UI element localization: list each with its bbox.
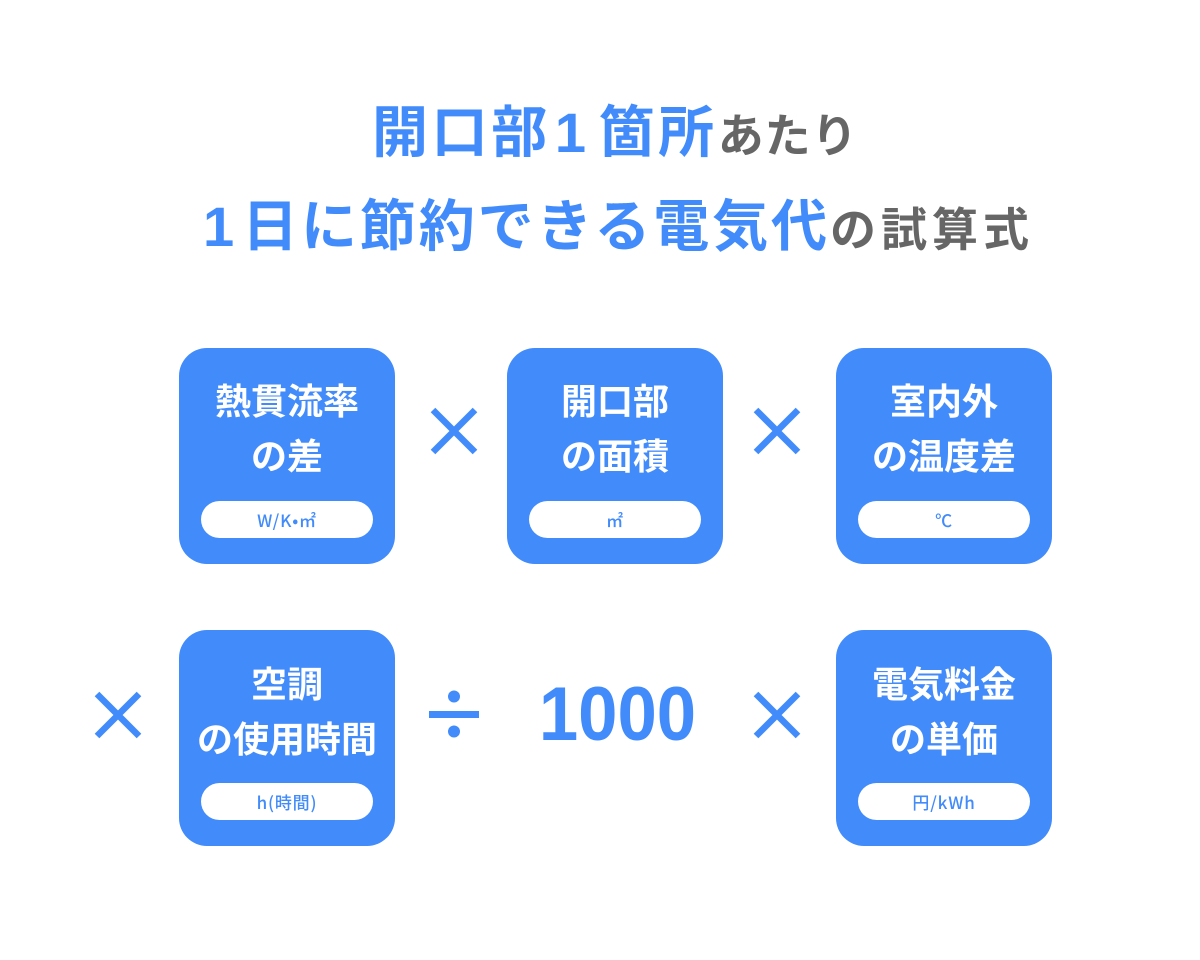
unit: ℃: ℃ <box>935 507 953 532</box>
label: 室内外: 室内外 <box>890 381 998 422</box>
panel: 開口部の面積 <box>507 348 723 564</box>
operator: multiply 1 <box>430 408 478 454</box>
label: 電気料金: 電気料金 <box>872 664 1016 705</box>
panel: 熱貫流率の差 <box>179 348 395 564</box>
label: の面積: の面積 <box>561 436 669 477</box>
label: の使用時間: の使用時間 <box>197 719 377 760</box>
operator: multiply 3 <box>94 692 142 738</box>
unit: 円/kWh <box>858 783 1030 820</box>
panel: 電気料金の単価 <box>836 630 1052 846</box>
title line 2: 1日に節約できる電気代の試算式 <box>203 195 1034 258</box>
panel: 空調の使用時間 <box>179 630 395 846</box>
label: 空調: 空調 <box>251 664 323 705</box>
title <box>203 101 1034 258</box>
label: 開口部: 開口部 <box>561 381 669 422</box>
unit: W/K・㎡ <box>201 501 373 538</box>
operator: multiply 2 <box>754 408 800 454</box>
label: の差: の差 <box>251 436 323 477</box>
unit: W/K・㎡: W/K•㎡ <box>257 507 317 532</box>
title line 1: 開口部1箇所あたり <box>372 101 858 164</box>
operator: multiply 4 <box>754 692 800 738</box>
number: 1000: 1000 <box>539 672 696 757</box>
label: 熱貫流率: 熱貫流率 <box>215 381 359 422</box>
unit: h(時間): h(時間) <box>257 789 317 814</box>
unit: ㎡ <box>529 501 701 538</box>
unit: ℃ <box>858 501 1030 538</box>
unit: h(時間) <box>201 783 373 820</box>
label: の単価: の単価 <box>890 719 998 760</box>
label: の温度差: の温度差 <box>872 436 1016 477</box>
panel: 室内外の温度差 <box>836 348 1052 564</box>
operator: divide <box>429 690 479 738</box>
unit: 円/kWh: 円/kWh <box>912 789 976 814</box>
unit: ㎡: ㎡ <box>606 507 624 532</box>
